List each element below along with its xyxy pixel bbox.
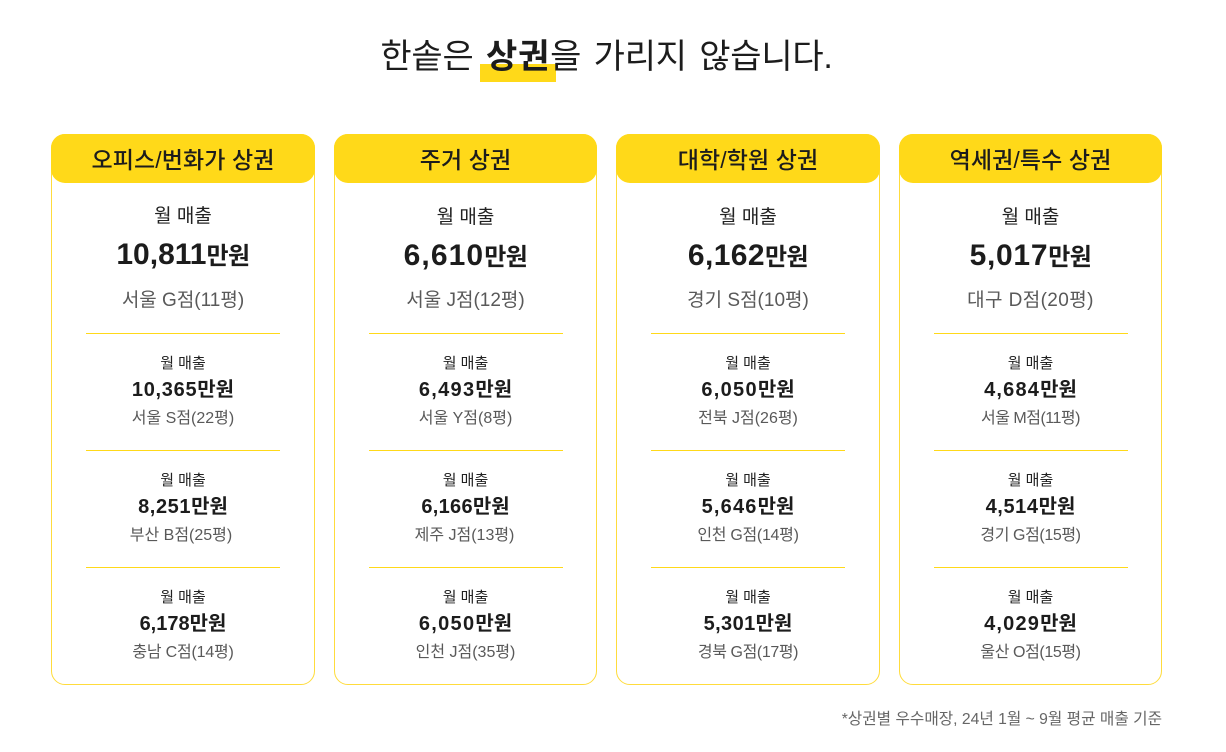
store 3: 월 매출 — [725, 589, 771, 606]
store 1: 월 매출 — [725, 355, 771, 372]
store 1: 월 매출 — [1008, 355, 1053, 372]
store 2: 6,166만원 — [421, 496, 510, 518]
featured store — [687, 207, 809, 311]
panel header: 대학/학원 상권 — [678, 147, 818, 173]
store 3: 월 매출 — [160, 589, 206, 606]
panel header — [334, 134, 597, 183]
store 2: 경기 G점(15평) — [980, 527, 1081, 544]
store 1 — [698, 355, 798, 427]
store 1: 월 매출 — [443, 355, 488, 372]
store 3 — [132, 589, 234, 661]
store 1 — [981, 355, 1080, 427]
store 2: 월 매출 — [1008, 472, 1053, 489]
store 2: 월 매출 — [725, 472, 771, 489]
store 1 — [419, 355, 512, 427]
footnote: *상권별 우수매장, 24년 1월 ~ 9월 평균 매출 기준 — [842, 711, 1162, 728]
store 3 — [980, 589, 1081, 661]
store 3: 6,050만원 — [419, 613, 512, 635]
store 1 — [132, 355, 234, 427]
store 3: 충남 C점(14평) — [132, 644, 234, 661]
panel: station / special — [899, 134, 1162, 685]
store 1: 서울 Y점(8평) — [419, 410, 512, 427]
store 3: 5,301만원 — [704, 613, 792, 635]
store 3: 경북 G점(17평) — [698, 644, 798, 661]
store 1: 6,493만원 — [419, 379, 512, 401]
store 3: 4,029만원 — [984, 613, 1077, 635]
featured store: 6,162만원 — [688, 239, 808, 272]
featured store: 5,017만원 — [970, 239, 1091, 272]
panel header: 역세권/특수 상권 — [950, 147, 1111, 173]
featured store: 서울 G점(11평) — [122, 290, 244, 311]
featured store: 월 매출 — [437, 207, 494, 228]
store 3 — [416, 589, 515, 661]
store 1: 서울 S점(22평) — [132, 410, 234, 427]
panel: office / downtown — [51, 134, 315, 685]
featured store: 10,811만원 — [116, 238, 250, 271]
featured store — [967, 207, 1094, 311]
store 2: 제주 J점(13평) — [415, 527, 514, 544]
store 2 — [415, 472, 514, 544]
store 3: 월 매출 — [1008, 589, 1053, 606]
store 3: 인천 J점(35평) — [416, 644, 515, 661]
store 3: 월 매출 — [443, 589, 488, 606]
panel header — [616, 134, 880, 183]
featured store — [116, 206, 250, 311]
store 1: 6,050만원 — [701, 379, 795, 401]
store 2: 8,251만원 — [138, 496, 228, 518]
title text: 한솥은 상권을 가리지 않습니다. — [380, 38, 833, 76]
panel header — [899, 134, 1162, 183]
store 2: 월 매출 — [443, 472, 488, 489]
store 2: 4,514만원 — [986, 496, 1075, 518]
panel: university / academy — [616, 134, 880, 685]
store 2: 인천 G점(14평) — [697, 527, 799, 544]
featured store: 대구 D점(20평) — [967, 290, 1094, 311]
featured store — [404, 207, 527, 311]
store 1: 10,365만원 — [132, 379, 234, 401]
store 3: 6,178만원 — [140, 613, 226, 635]
featured store: 월 매출 — [154, 206, 212, 227]
featured store: 월 매출 — [719, 207, 777, 228]
store 3 — [698, 589, 798, 661]
store 1: 전북 J점(26평) — [698, 410, 798, 427]
title highlight — [480, 64, 556, 82]
store 3: 울산 O점(15평) — [980, 644, 1081, 661]
featured store: 서울 J점(12평) — [406, 290, 525, 311]
panel header — [51, 134, 315, 183]
store 2: 부산 B점(25평) — [130, 527, 232, 544]
featured store: 월 매출 — [1002, 207, 1059, 228]
panel header: 오피스/번화가 상권 — [91, 147, 275, 173]
store 2 — [130, 472, 232, 544]
panel header: 주거 상권 — [420, 147, 511, 173]
store 2 — [980, 472, 1081, 544]
title — [380, 38, 833, 82]
featured store: 경기 S점(10평) — [687, 290, 809, 311]
store 2: 월 매출 — [160, 472, 206, 489]
store 1: 서울 M점(11평) — [981, 410, 1080, 427]
panel: residential — [334, 134, 597, 685]
store 2: 5,646만원 — [702, 496, 794, 518]
featured store: 6,610만원 — [404, 239, 527, 272]
store 1: 월 매출 — [160, 355, 206, 372]
store 2 — [697, 472, 799, 544]
store 1: 4,684만원 — [984, 379, 1077, 401]
